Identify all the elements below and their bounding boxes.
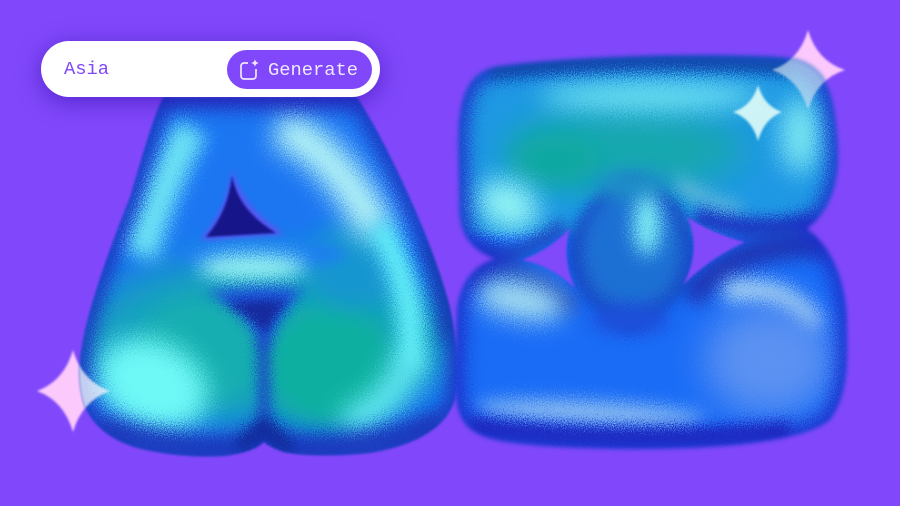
A right arm highlight [278,128,378,232]
sparkle overlay: bottom left on letter [78,363,110,409]
generate button [227,50,372,89]
Z bottom bar shading [690,245,830,300]
sparkle overlay: top right large on letter [772,58,826,110]
Z center knot [567,175,697,332]
Z edges [455,55,847,449]
icon: sparkle square [240,59,259,80]
illustration: bubbly letters A and Z with sparkles [36,30,850,458]
sparkle base: top right large [772,30,845,110]
Z base [456,53,840,244]
A teal body [75,255,455,425]
Z top bar teal [505,110,745,190]
letter Z [454,52,850,452]
Z gap: right [683,217,745,285]
Z gap: left [522,228,575,288]
A edges [79,97,458,457]
letter A [78,96,458,458]
Z shadows under top bar [695,216,815,227]
input text: Asia [64,58,109,80]
button label: Generate [268,59,358,81]
sparkle base: bottom left [37,350,110,432]
A counter [200,168,285,240]
A base [78,96,456,458]
Z bottom bar highlights [471,273,569,327]
sparkle: top right small [733,85,782,141]
Z top bar highlights [540,82,760,110]
A left leg highlight [81,321,223,449]
A crossbar [177,239,347,269]
search bar [41,41,380,97]
A left arm highlight [140,128,192,255]
A lower notch [205,287,305,350]
